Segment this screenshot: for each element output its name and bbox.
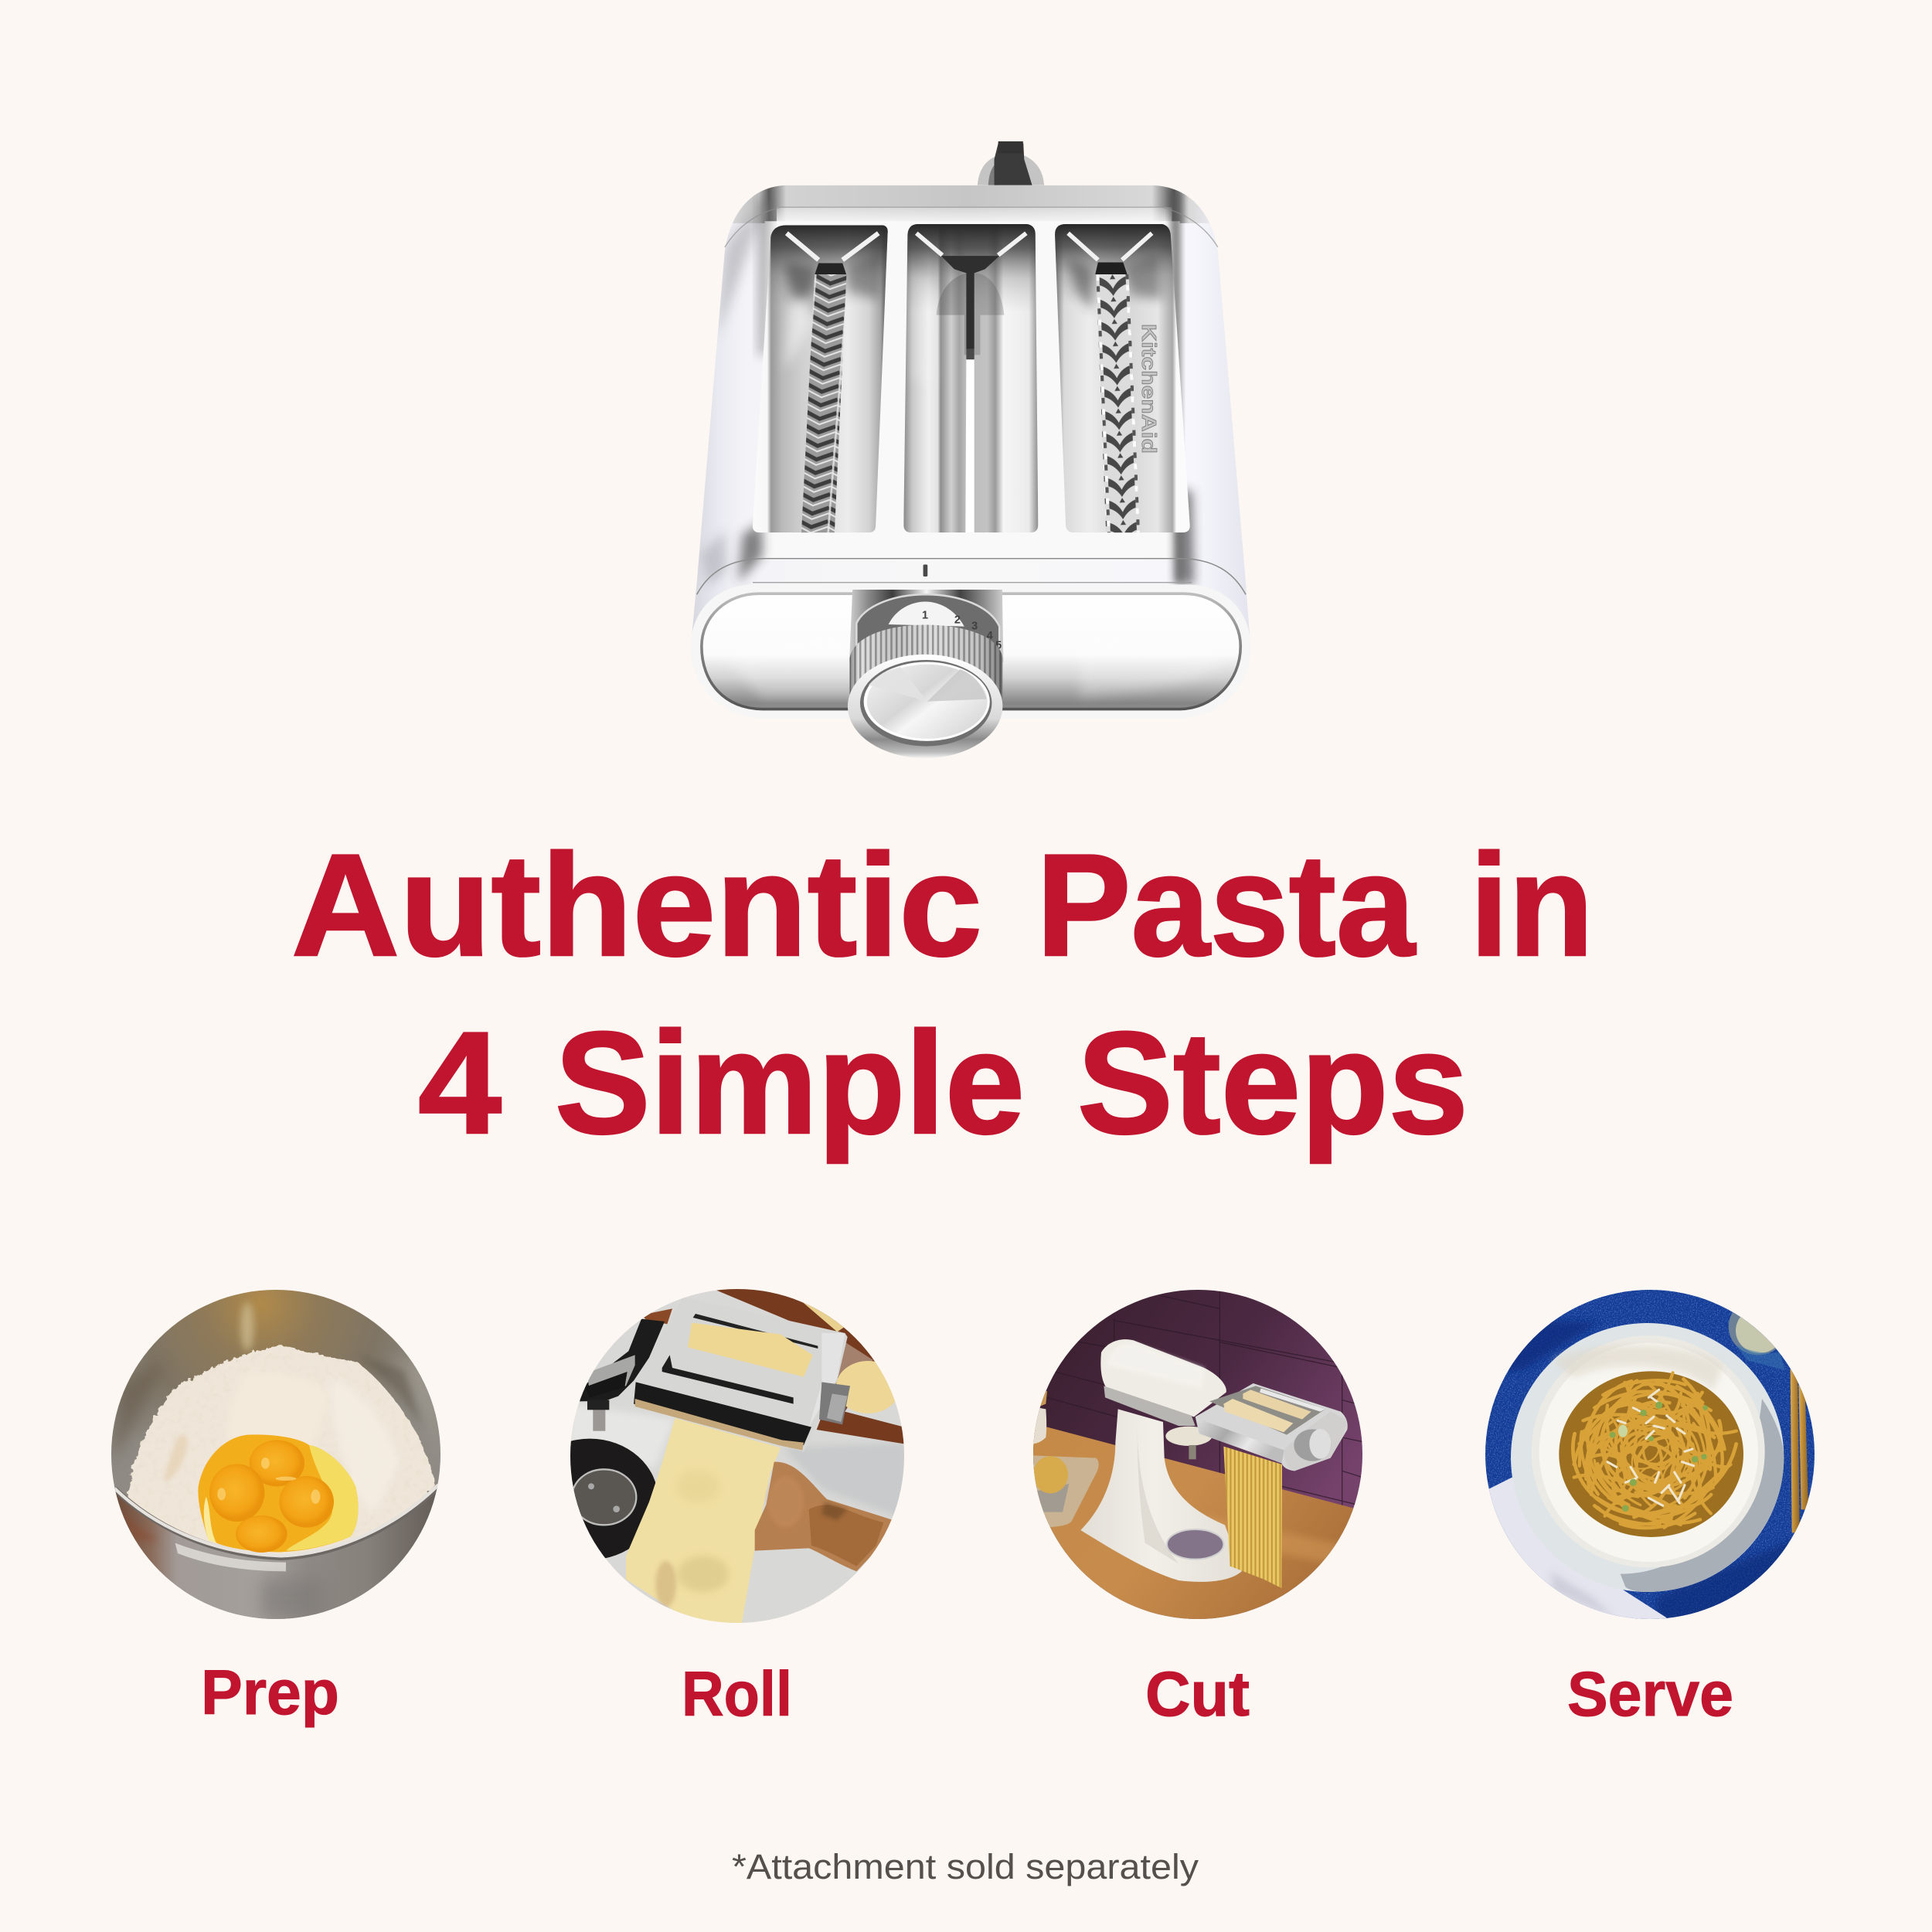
title: Pasta <box>1036 824 1416 986</box>
step 3: Cut <box>1032 1288 1366 1730</box>
slot: centre flat roller <box>900 221 1040 536</box>
pasta strands <box>1223 1447 1282 1588</box>
noodles <box>1553 1349 1753 1558</box>
jar <box>1034 1408 1046 1444</box>
cutter attachment <box>1196 1383 1348 1471</box>
adjustment knob <box>848 590 1003 758</box>
title: 4 <box>418 1002 502 1164</box>
label: Prep: Prep <box>201 1658 339 1728</box>
dial numbers: 5 <box>995 640 1002 652</box>
title: Simple <box>555 1002 1025 1164</box>
wooden board <box>711 1288 904 1444</box>
bowl rim <box>114 1486 438 1557</box>
slot: left roller <box>749 221 893 536</box>
chopsticks <box>1791 1369 1800 1532</box>
drive shaft connector <box>978 141 1044 185</box>
front face plate <box>691 584 1250 718</box>
dial numbers: 3 <box>971 621 978 633</box>
napkin <box>1484 1478 1667 1623</box>
roller: wide wavy texture <box>1096 274 1140 532</box>
dial numbers <box>922 609 1002 652</box>
dial numbers: 1 <box>922 609 928 621</box>
label: Roll: Roll <box>682 1659 792 1730</box>
egg yolks <box>209 1440 334 1553</box>
roller gap highlight <box>965 359 975 532</box>
product image: pasta cutter attachment <box>691 141 1250 758</box>
glass disc <box>1167 1529 1223 1560</box>
title: Authentic <box>291 824 982 986</box>
dough round <box>836 1361 900 1413</box>
title: in <box>1470 824 1594 986</box>
dial numbers: 4 <box>987 630 993 642</box>
footnote: *Attachment sold separately <box>732 1847 1199 1886</box>
flour <box>128 1345 435 1559</box>
hand <box>755 1462 896 1571</box>
label: Serve: Serve <box>1567 1659 1733 1730</box>
pan and glass <box>570 1439 655 1558</box>
knob <box>819 1382 850 1424</box>
dial numbers: 2 <box>954 614 961 626</box>
photo: stand mixer cutting noodles <box>1032 1288 1366 1623</box>
step 2: Roll <box>570 1289 904 1717</box>
title <box>291 824 1594 1164</box>
label: Cut: Cut <box>1145 1659 1250 1730</box>
title: Steps <box>1077 1002 1468 1164</box>
photo: pasta sheet rolled through attachment <box>570 1289 904 1623</box>
embossed brand mark: KitchenAid <box>1138 324 1159 454</box>
plate <box>1511 1323 1784 1592</box>
step 1: Prep <box>108 1287 443 1728</box>
stand mixer <box>1080 1409 1242 1582</box>
photo: flour and eggs in a steel bowl <box>108 1287 443 1623</box>
pasta sheet <box>626 1418 781 1623</box>
bowl <box>1532 1335 1765 1567</box>
stand mixer <box>580 1319 665 1401</box>
setting marker <box>923 565 927 577</box>
bowl exterior <box>116 1487 437 1619</box>
cheese and scallion <box>1607 1389 1694 1505</box>
wooden counter <box>1032 1426 1359 1623</box>
photo: bowl of noodles on a blue placemat <box>1484 1288 1818 1623</box>
attachment <box>682 1298 848 1451</box>
attachment body <box>691 185 1250 665</box>
step 4: Serve <box>1484 1288 1818 1730</box>
egg whites <box>198 1434 358 1552</box>
glass <box>1729 1298 1787 1355</box>
board and noodle nest <box>1032 1455 1099 1527</box>
slot: right roller <box>1052 221 1192 536</box>
roller: fine chevron texture <box>801 274 846 532</box>
